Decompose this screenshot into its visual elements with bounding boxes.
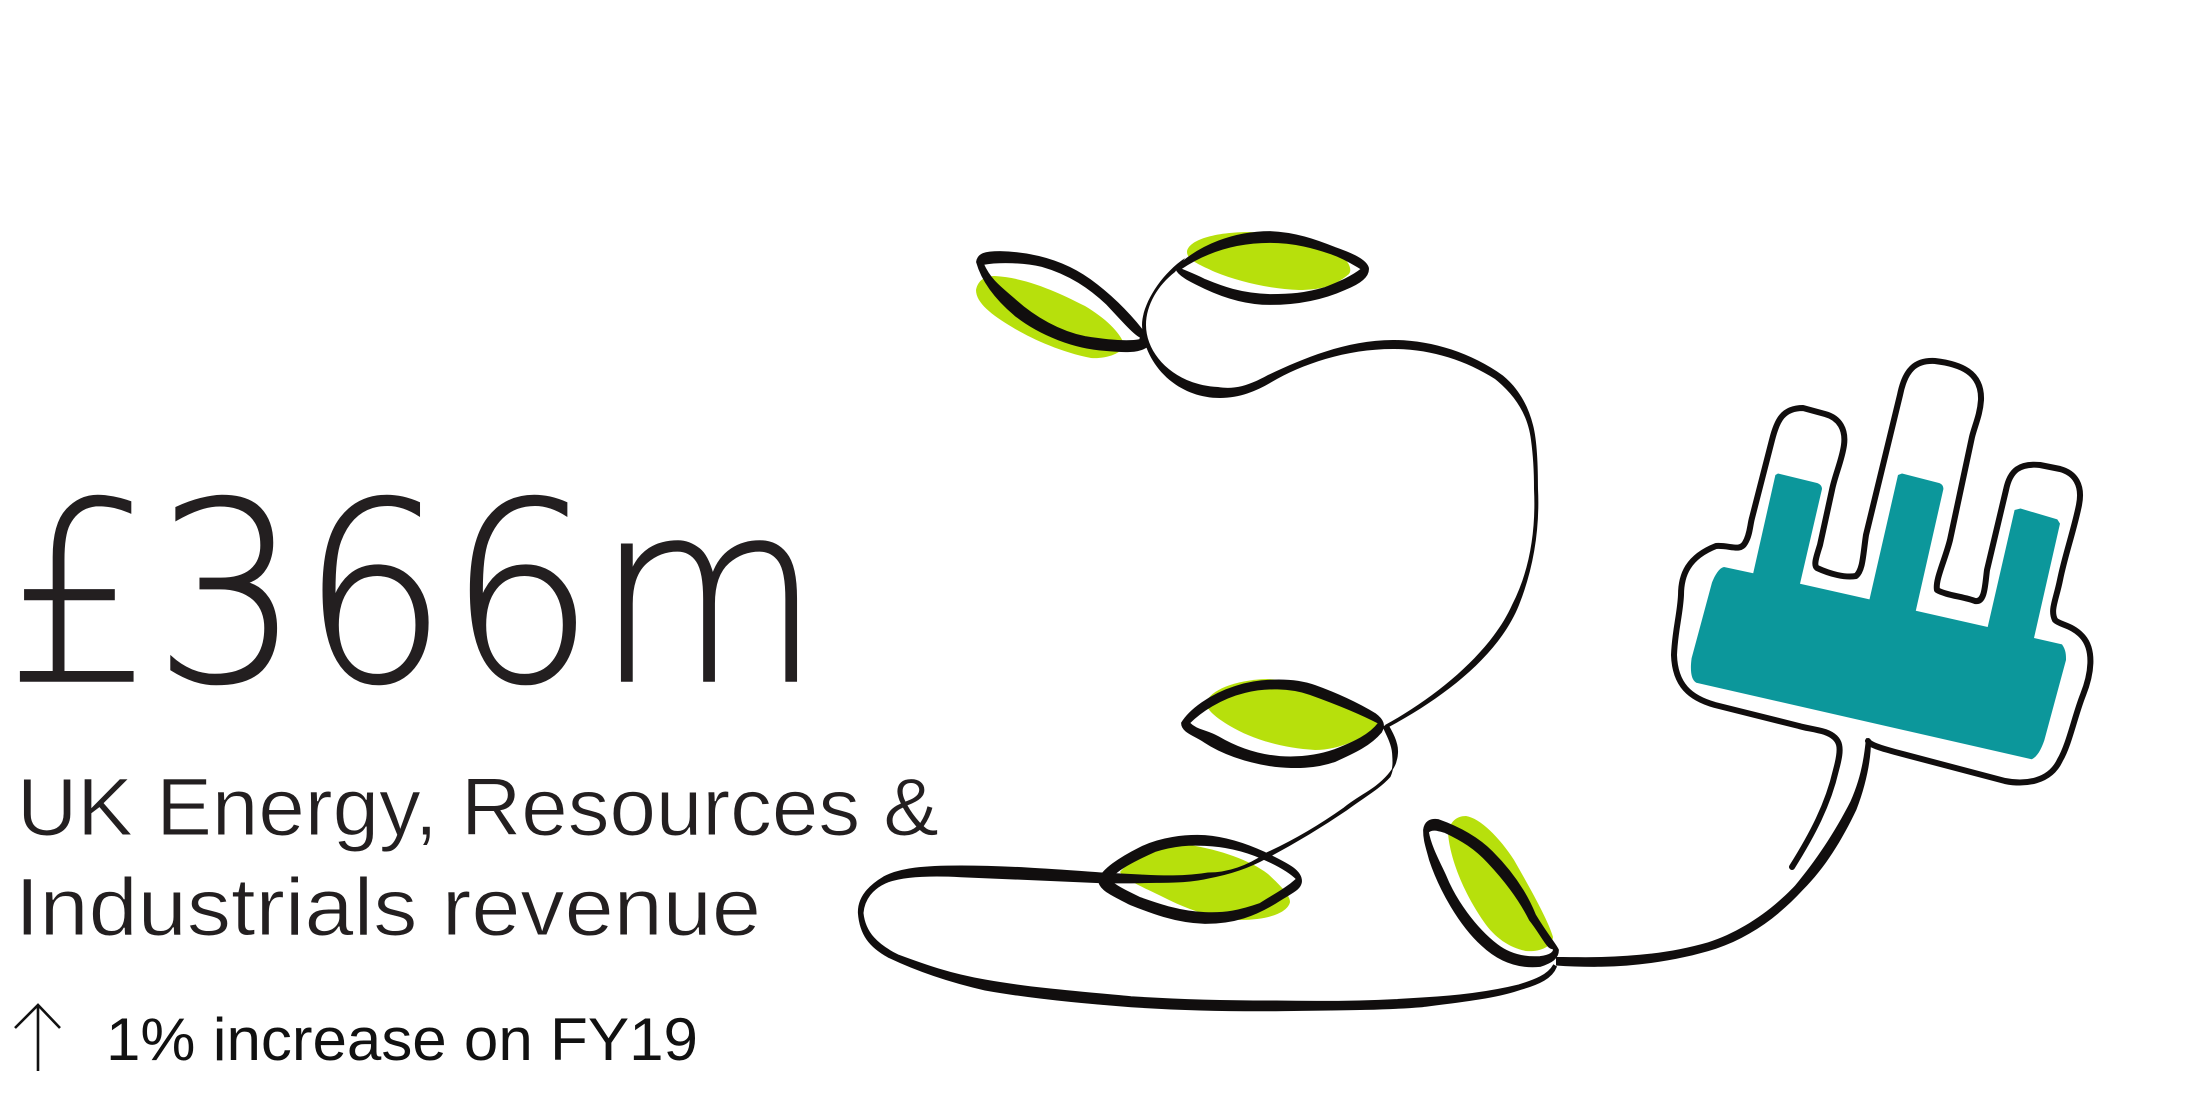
plug outline — [1674, 361, 2090, 867]
leaf outline: upper right — [1176, 232, 1368, 304]
leaf outline: lower — [1099, 836, 1301, 923]
illustration: plant vine cable and plug — [858, 232, 2090, 1011]
leaf outlines — [977, 232, 1558, 966]
leaf outline: middle — [1182, 680, 1383, 767]
leaf fill: middle — [1206, 679, 1380, 750]
cable: lower loop — [858, 725, 1556, 1011]
subtitle line 2: Industrials revenue — [15, 862, 761, 953]
cable: plug lead — [1556, 738, 1871, 967]
leaf fill: lower — [1120, 845, 1290, 920]
green leaf fills — [976, 232, 1553, 951]
leaf fill: upper left — [976, 276, 1124, 358]
leaf outline: upper left — [977, 252, 1147, 351]
leaf outline: near cable end — [1424, 820, 1558, 966]
vine: top loop and right-hand curve — [1142, 258, 1538, 728]
leaf fill: near cable end — [1448, 816, 1553, 951]
subtitle line 1: UK Energy, Resources & — [17, 762, 939, 853]
plug body: teal prongs — [1691, 474, 2066, 759]
headline figure: £366m: £366m — [6, 449, 821, 740]
leaf fill: upper right — [1187, 232, 1350, 290]
subtitle block — [15, 762, 939, 953]
icon: up arrow — [15, 1005, 60, 1071]
change note: 1% increase on FY19: 1% increase on FY19 — [106, 1006, 698, 1073]
